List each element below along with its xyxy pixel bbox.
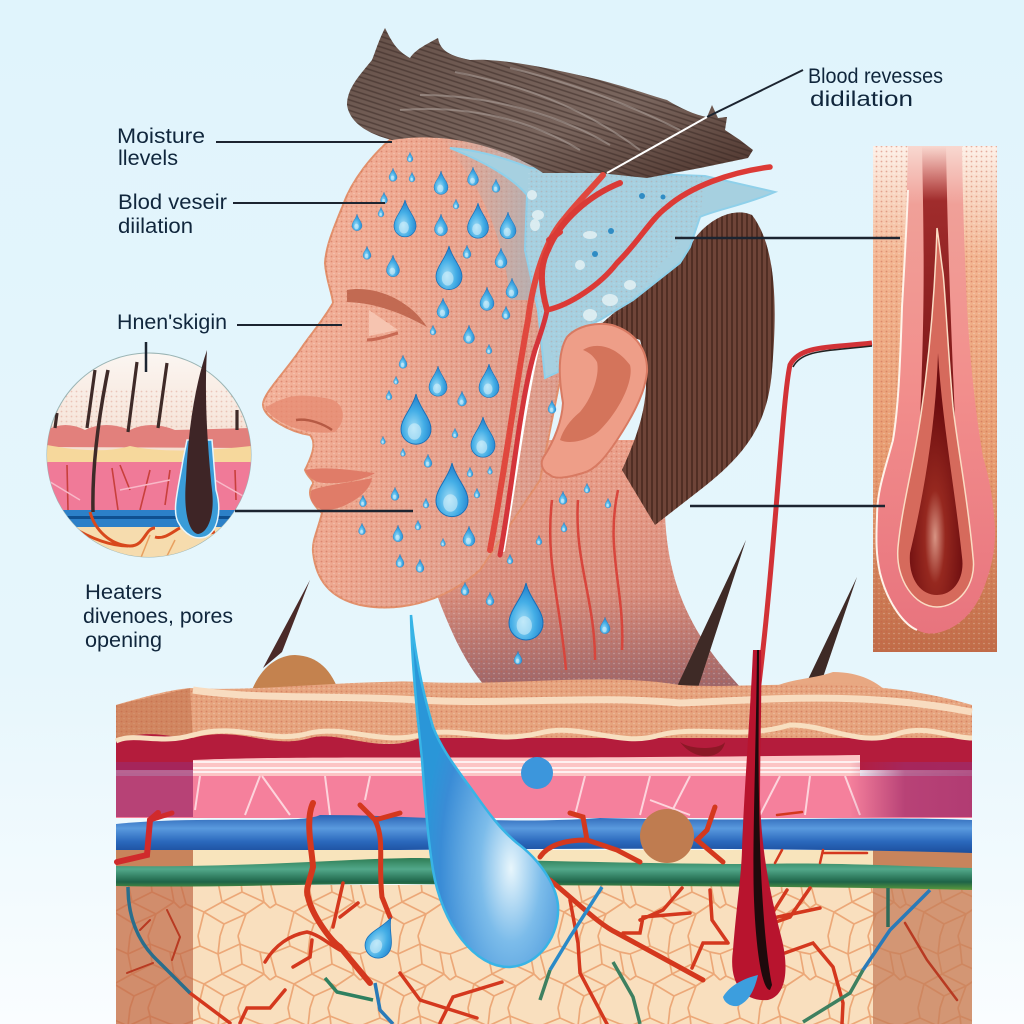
small red pocket — [680, 742, 725, 756]
brown nodule — [640, 809, 694, 863]
blue vein — [116, 815, 972, 853]
neck — [435, 440, 745, 692]
nose shading — [265, 396, 343, 433]
red capillaries — [117, 803, 957, 1024]
label: moisture levels: Moisture — [117, 125, 205, 148]
label: blood vessel dilation: diilation — [118, 215, 193, 238]
dermis red band — [116, 734, 972, 770]
panel: follicle close-up — [873, 146, 997, 652]
cream band side shading — [116, 850, 972, 870]
label: heaters, pores opening: divenoes, pores — [83, 605, 233, 628]
neck veins — [550, 490, 622, 670]
large water drop — [411, 615, 558, 967]
nostril — [296, 420, 332, 430]
back hair — [600, 212, 775, 525]
epidermis — [116, 679, 972, 745]
inner sheath — [898, 228, 974, 607]
bottom blue drop — [723, 975, 758, 1006]
label: blood vessel dilation: Blod veseir — [118, 191, 227, 214]
label: heaters, pores opening — [83, 581, 233, 652]
label: blood vessel dilation — [118, 191, 385, 238]
moisture bubbles — [527, 190, 636, 321]
blue and green capillaries — [128, 887, 930, 1024]
purple side panels — [116, 762, 972, 817]
scalp moisture patch — [450, 148, 775, 378]
red vessel connecting panel to skin — [757, 343, 872, 700]
label: moisture levels: llevels — [118, 147, 178, 170]
surface hairs and bumps — [252, 540, 890, 700]
follicle left highlight — [876, 190, 917, 630]
label: blood vessels dilation (top right): didilation — [810, 88, 913, 111]
label: heaters, pores opening: opening — [85, 629, 162, 652]
pink layer — [116, 776, 972, 818]
eye — [369, 310, 398, 336]
small blue drop — [361, 912, 403, 962]
bulb — [910, 353, 962, 595]
pale pink band — [193, 755, 860, 778]
cream wave line — [116, 725, 972, 741]
head profile — [263, 130, 620, 607]
ear — [542, 324, 647, 478]
leader lines — [146, 238, 900, 511]
central channel — [920, 146, 955, 420]
label: moisture levels — [117, 125, 392, 170]
skin cross-section block — [116, 540, 972, 1024]
cream band — [116, 850, 972, 870]
side shading — [116, 885, 972, 1024]
green vessel — [116, 858, 972, 890]
small blue sphere — [521, 757, 553, 789]
label: heaters, pores opening: Heaters — [85, 581, 162, 604]
lips — [305, 468, 375, 510]
brow — [347, 289, 427, 327]
dark left side of the epidermis — [116, 688, 193, 745]
hair shaft with vessel — [732, 650, 785, 1000]
inset circle: hair follicle cross-section — [47, 350, 251, 566]
top hair — [347, 28, 753, 178]
label: blood vessels dilation (top right) — [607, 65, 943, 173]
label: blood vessels dilation (top right): Blood revesses — [808, 65, 943, 88]
lower lid — [367, 333, 398, 340]
label: skin: Hnen'skigin — [117, 311, 227, 334]
water droplets — [352, 152, 611, 664]
blood vessels on the face — [490, 167, 770, 555]
large hair shaft — [185, 350, 213, 534]
fat layer — [116, 885, 972, 1024]
forehead grey sheen — [440, 138, 540, 300]
